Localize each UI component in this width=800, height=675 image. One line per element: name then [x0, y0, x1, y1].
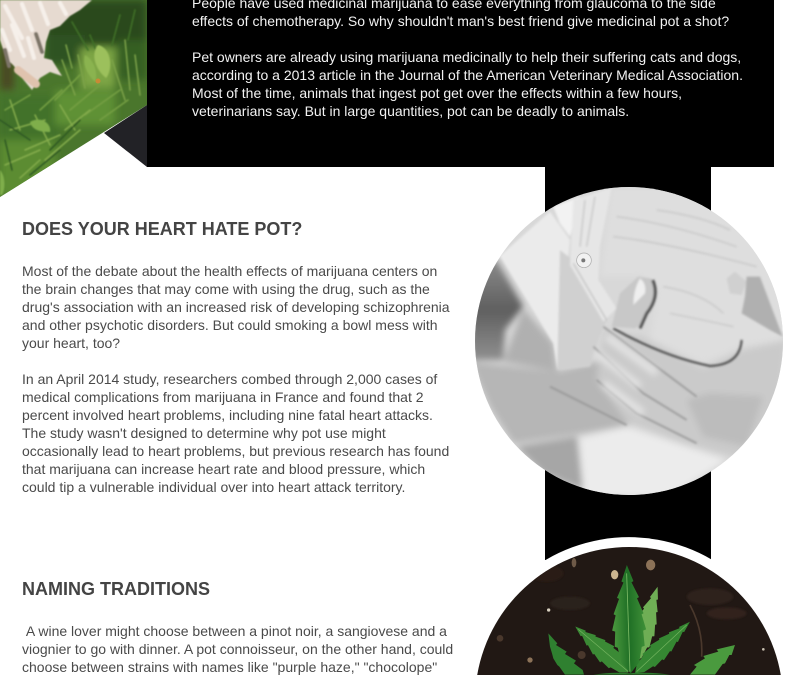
text block: heart section: your heart, too? [22, 335, 120, 351]
panel: black text panel [147, 0, 774, 167]
photo: dog sniffing grass [0, 0, 147, 197]
text block: heart section: and other psychotic disorders. But could smoking a bowl mess with [22, 317, 438, 333]
text block: heart section: that marijuana can increase heart rate and blood pressure, which [22, 461, 425, 477]
text block: naming section: A wine lover might choose between a pinot noir, a sangiovese and a [26, 623, 447, 639]
text block: panel copy on medicinal pot for pets: effects of chemotherapy. So why shouldn't man's best friend give medicinal pot a shot? [192, 13, 729, 29]
text block: naming section: choose between strains with names like "purple haze," "chocolope" [22, 659, 437, 675]
heading: naming traditions: NAMING TRADITIONS [22, 579, 210, 599]
text block: heart section: medical complications from marijuana in France and found that 2 [22, 389, 424, 405]
text block: heart section: Most of the debate about the health effects of marijuana centers on [22, 263, 437, 279]
circle photo: hands on chest [470, 180, 790, 500]
text block: panel copy on medicinal pot for pets: Pet owners are already using marijuana medicinally to help their suffering cats and dogs, [192, 49, 741, 65]
text block: heart section [22, 263, 450, 495]
text block: naming section [22, 623, 453, 675]
text block: heart section: the brain changes that may come with using the drug, such as the [22, 281, 430, 297]
text block: heart section: could tip a vulnerable individual over into heart attack territory. [22, 479, 405, 495]
text block: panel copy on medicinal pot for pets: veterinarians say. But in large quantities, pot can be deadly to animals. [192, 103, 629, 119]
text block: heart section: drug's association with an increased risk of developing schizophrenia [22, 299, 450, 315]
dark triangle accent [104, 105, 147, 167]
white ring around lower circle [467, 537, 791, 675]
heading: does your heart hate pot: DOES YOUR HEART HATE POT? [22, 219, 302, 239]
shirt panel [500, 212, 570, 370]
cannabis leaf [548, 564, 735, 675]
circle photo: cannabis leaf on soil [475, 545, 783, 675]
text block: heart section: In an April 2014 study, researchers combed through 2,000 cases of [22, 371, 437, 387]
text block: heart section: percent involved heart problems, including nine fatal heart attacks. [22, 407, 433, 423]
text block: panel copy on medicinal pot for pets [192, 0, 743, 119]
text block: heart section: The study wasn't designed to determine why pot use might [22, 425, 386, 441]
text block: panel copy on medicinal pot for pets: according to a 2013 article in the Journal of the American Veterinary Medical Association. [192, 67, 743, 83]
text block: panel copy on medicinal pot for pets: Most of the time, animals that ingest pot get over the effects within a few hours, [192, 85, 682, 101]
text block: heart section: occasionally lead to heart problems, but previous research has found [22, 443, 449, 459]
black vertical band [545, 167, 711, 560]
text block: naming section: viognier to go with dinner. A pot connoisseur, on the other hand, could [22, 641, 453, 657]
